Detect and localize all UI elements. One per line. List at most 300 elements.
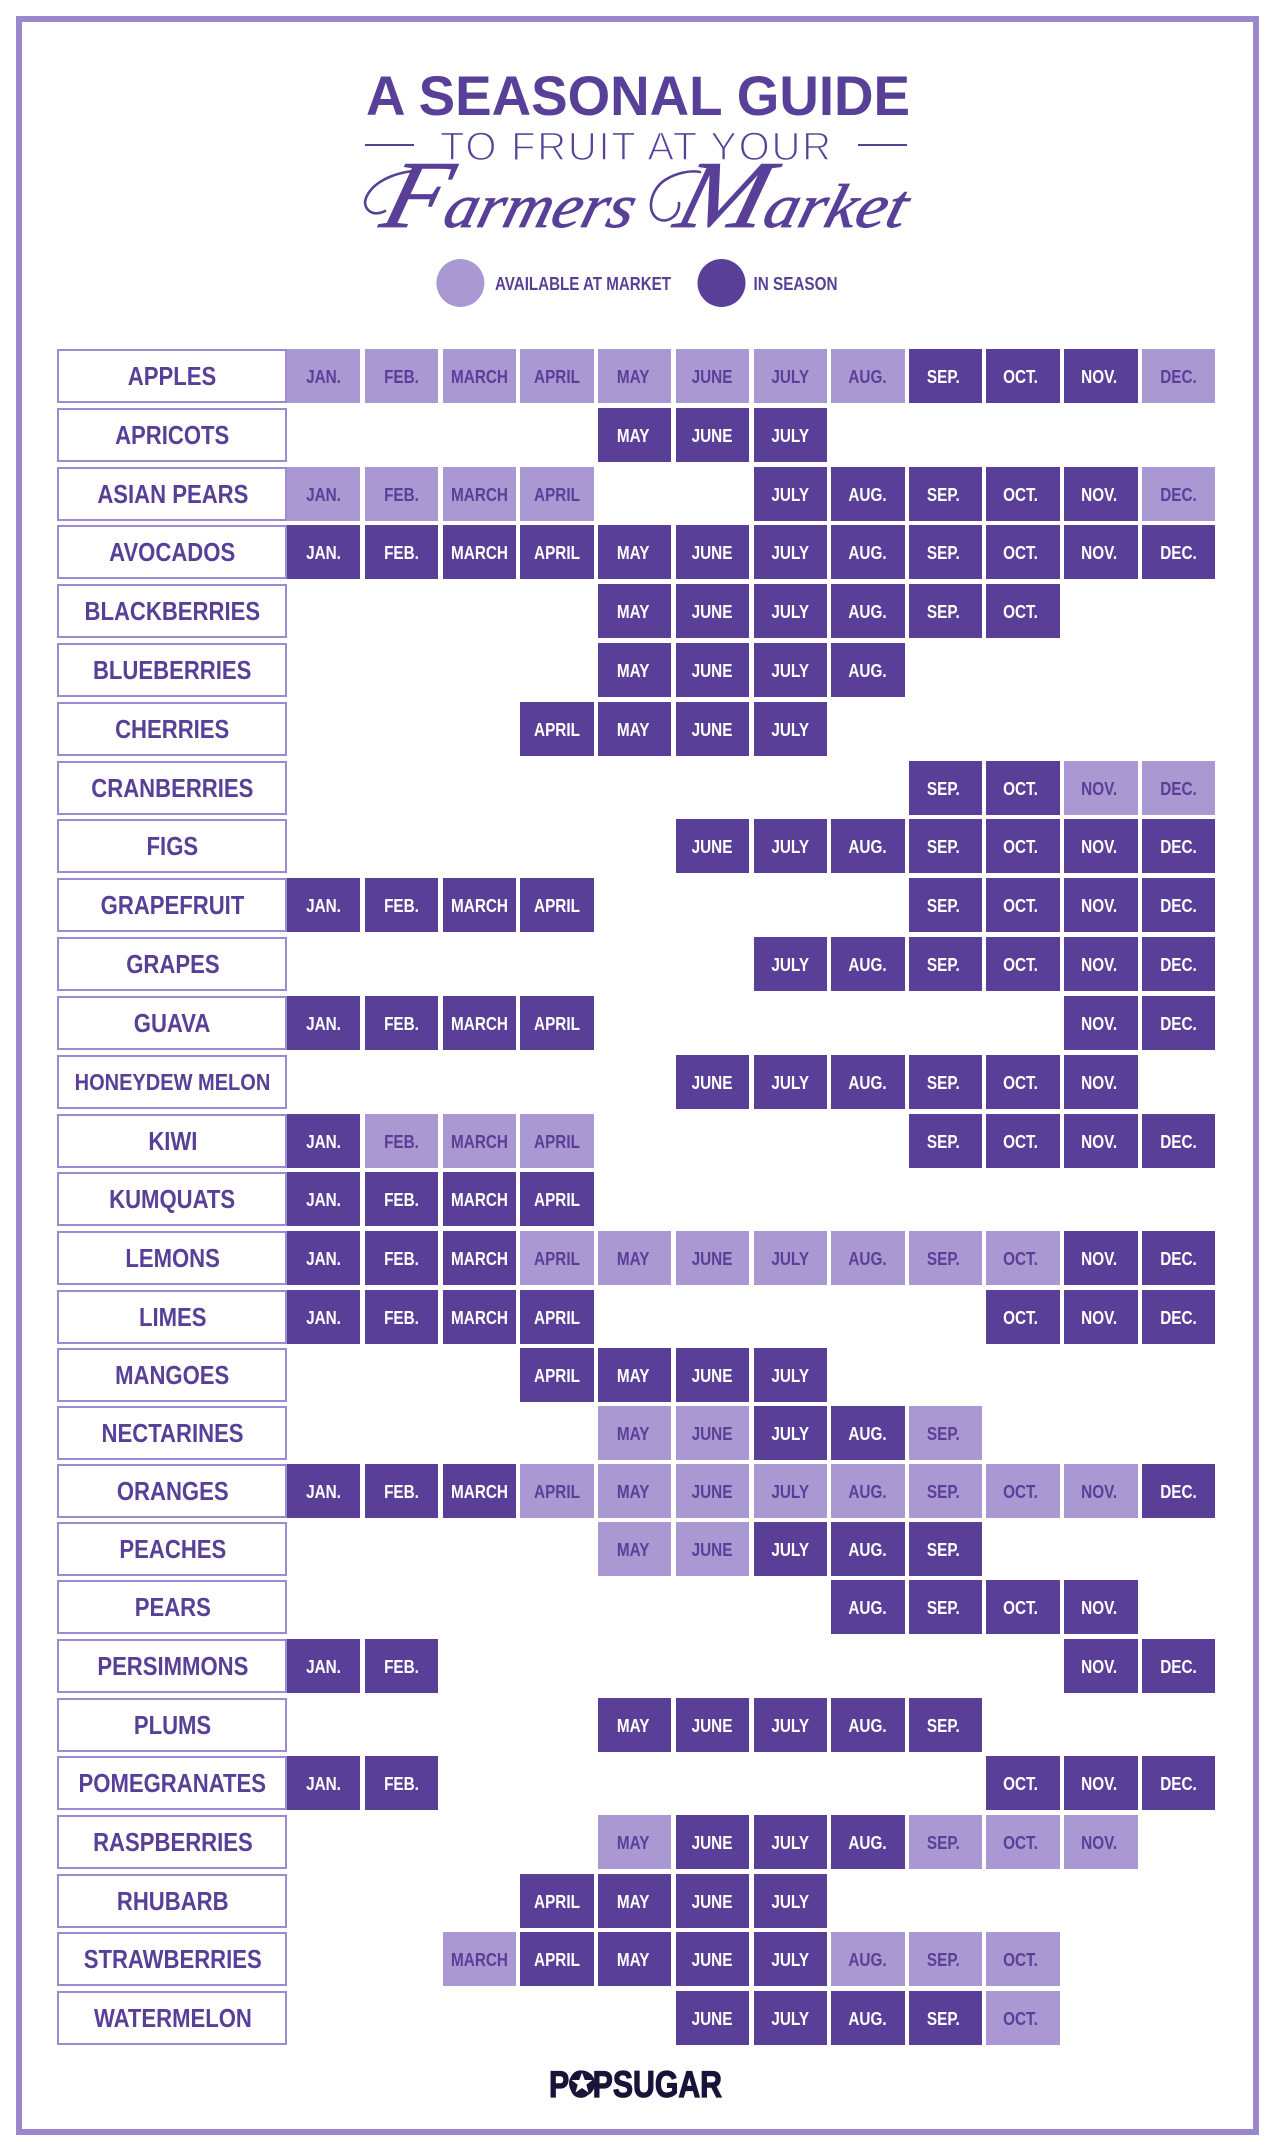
months: grapefruit: APRIL (534, 896, 580, 916)
months: guava: MARCH (451, 1014, 508, 1034)
months: limes: DEC. (1160, 1308, 1197, 1328)
months: persimmons: FEB. (384, 1657, 419, 1677)
script title: Farmers Market: Market (664, 143, 926, 249)
months: cherries: JULY (771, 720, 809, 740)
months: grapes: OCT. (1003, 955, 1038, 975)
label: asian pears: ASIAN PEARS (97, 479, 248, 509)
label: avocados: AVOCADOS (109, 537, 236, 567)
row: limes (57, 1290, 1215, 1344)
row: honeydew melon (57, 1055, 1138, 1109)
row: guava (57, 996, 1215, 1050)
months: lemons: JUNE (692, 1249, 733, 1269)
months: kiwi: DEC. (1160, 1132, 1197, 1152)
months: nectarines: AUG. (849, 1424, 887, 1444)
months: guava (287, 996, 1215, 1050)
row: strawberries (0, 1932, 1275, 1986)
months: asian pears: DEC. (1160, 485, 1197, 505)
months: apples: OCT. (1003, 367, 1038, 387)
legend: available at market: AVAILABLE AT MARKET (495, 273, 672, 294)
months: raspberries: MAY (617, 1833, 649, 1853)
row: grapefruit (57, 878, 1215, 932)
months: cranberries (909, 761, 1215, 815)
months: blackberries: MAY (617, 602, 649, 622)
months: oranges: AUG. (849, 1482, 887, 1502)
label: lemons: LEMONS (125, 1243, 220, 1273)
label: strawberries: STRAWBERRIES (83, 1944, 262, 1974)
months: asian pears: FEB. (384, 485, 419, 505)
months: oranges: MARCH (451, 1482, 508, 1502)
months: kiwi: APRIL (534, 1132, 580, 1152)
months: avocados: FEB. (384, 543, 419, 563)
months: lemons: MAY (617, 1249, 649, 1269)
months: raspberries: OCT. (1003, 1833, 1038, 1853)
row: cranberries (57, 761, 1215, 815)
months: persimmons: NOV. (1081, 1657, 1117, 1677)
label: plums (57, 1698, 287, 1752)
legend: in season: IN SEASON (754, 273, 838, 294)
months: apples: AUG. (849, 367, 887, 387)
months: guava: DEC. (1160, 1014, 1197, 1034)
months: figs: DEC. (1160, 837, 1197, 857)
label: strawberries (57, 1932, 287, 1986)
months: watermelon: SEP. (926, 2009, 959, 2029)
months: avocados: NOV. (1081, 543, 1117, 563)
months: honeydew melon: JULY (771, 1073, 809, 1093)
months: cranberries: DEC. (1160, 779, 1197, 799)
months: avocados: JULY (771, 543, 809, 563)
label: raspberries: RASPBERRIES (93, 1827, 252, 1857)
months: asian pears: APRIL (534, 485, 580, 505)
label: oranges (57, 1464, 287, 1518)
months: persimmons: DEC. (1160, 1657, 1197, 1677)
label: oranges: ORANGES (117, 1476, 228, 1506)
label: kumquats (57, 1172, 287, 1226)
months: blackberries: JULY (771, 602, 809, 622)
title line: A Seasonal Guide: A SEASONAL GUIDE (366, 64, 910, 127)
months: pomegranates: NOV. (1081, 1774, 1117, 1794)
label: avocados (57, 525, 287, 579)
label: watermelon: WATERMELON (94, 2003, 251, 2033)
label: kiwi (57, 1114, 287, 1168)
months: watermelon: AUG. (849, 2009, 887, 2029)
months: grapefruit (287, 878, 1215, 932)
months: apples: JULY (771, 367, 809, 387)
months: apples: JAN. (306, 367, 341, 387)
label: cherries (57, 702, 287, 756)
label: blackberries: BLACKBERRIES (85, 596, 260, 626)
months: blackberries: OCT. (1003, 602, 1038, 622)
months: oranges (0, 1464, 1275, 1518)
months: nectarines (598, 1406, 982, 1460)
months: strawberries: AUG. (849, 1950, 887, 1970)
label: rhubarb (57, 1874, 287, 1928)
label: honeydew melon (57, 1055, 287, 1109)
label: apricots: APRICOTS (115, 420, 230, 450)
months: guava: APRIL (534, 1014, 580, 1034)
months: avocados: JAN. (306, 543, 341, 563)
row: cherries (57, 702, 827, 756)
months: oranges: JAN. (306, 1482, 341, 1502)
months: asian pears: JULY (771, 485, 809, 505)
label: grapefruit (57, 878, 287, 932)
row: plums (0, 1698, 1275, 1752)
months: guava: JAN. (306, 1014, 341, 1034)
months: cherries: JUNE (692, 720, 733, 740)
row: blackberries (57, 584, 1060, 638)
months: blueberries: JULY (771, 661, 809, 681)
header: title and legend (364, 64, 926, 307)
months: oranges: APRIL (534, 1482, 580, 1502)
months: nectarines: MAY (617, 1424, 649, 1444)
label: blueberries: BLUEBERRIES (93, 655, 252, 685)
months: peaches: MAY (617, 1540, 649, 1560)
legend: available at market (436, 259, 672, 307)
months: grapefruit: JAN. (306, 896, 341, 916)
months: honeydew melon: NOV. (1081, 1073, 1117, 1093)
months: mangoes: JULY (771, 1366, 809, 1386)
label: guava (57, 996, 287, 1050)
months: avocados: AUG. (849, 543, 887, 563)
months: blackberries: AUG. (849, 602, 887, 622)
months: oranges: JUNE (692, 1482, 733, 1502)
months: raspberries: AUG. (849, 1833, 887, 1853)
months: cranberries: SEP. (926, 779, 959, 799)
months: grapefruit: FEB. (384, 896, 419, 916)
months: oranges: DEC. (1160, 1482, 1197, 1502)
months: watermelon: OCT. (1003, 2009, 1038, 2029)
row: raspberries (0, 1815, 1275, 1869)
months: figs: SEP. (926, 837, 959, 857)
months: asian pears: OCT. (1003, 485, 1038, 505)
months: kiwi (287, 1114, 1215, 1168)
months: asian pears: JAN. (306, 485, 341, 505)
row: nectarines (57, 1406, 982, 1460)
months: mangoes: APRIL (534, 1366, 580, 1386)
row: kumquats (57, 1172, 594, 1226)
months: pomegranates: DEC. (1160, 1774, 1197, 1794)
row: blueberries (57, 643, 905, 697)
months: apples: FEB. (384, 367, 419, 387)
months: kumquats: JAN. (306, 1190, 341, 1210)
months: apples: MARCH (451, 367, 508, 387)
label: cranberries (57, 761, 287, 815)
months: rhubarb: JULY (771, 1892, 809, 1912)
months: avocados: DEC. (1160, 543, 1197, 563)
months: apples: SEP. (926, 367, 959, 387)
row: watermelon (0, 1991, 1275, 2045)
label: apples: APPLES (128, 361, 217, 391)
months: apples: DEC. (1160, 367, 1197, 387)
label: grapes: GRAPES (126, 949, 219, 979)
label: watermelon (57, 1991, 287, 2045)
months: cranberries: OCT. (1003, 779, 1038, 799)
months: plums: MAY (617, 1716, 649, 1736)
months: pears: OCT. (1003, 1598, 1038, 1618)
months: limes (287, 1290, 1215, 1344)
months: peaches: SEP. (926, 1540, 959, 1560)
legend: in season (698, 259, 838, 307)
label: grapefruit: GRAPEFRUIT (101, 890, 244, 920)
months: apricots (598, 408, 827, 462)
label: lemons (57, 1231, 287, 1285)
row: pears (0, 1580, 1275, 1634)
label: limes (57, 1290, 287, 1344)
months: raspberries: JULY (771, 1833, 809, 1853)
months: persimmons (0, 1639, 1275, 1693)
months: nectarines: JULY (771, 1424, 809, 1444)
row: mangoes (57, 1348, 827, 1402)
label: nectarines (57, 1406, 287, 1460)
months: pomegranates: FEB. (384, 1774, 419, 1794)
months: plums (0, 1698, 1275, 1752)
months: lemons: SEP. (926, 1249, 959, 1269)
months: kumquats (287, 1172, 594, 1226)
label: apricots (57, 408, 287, 462)
months: peaches (0, 1522, 1275, 1576)
months: mangoes: JUNE (692, 1366, 733, 1386)
row: kiwi (57, 1114, 1215, 1168)
months: apples: NOV. (1081, 367, 1117, 387)
months: plums: SEP. (926, 1716, 959, 1736)
months: cranberries: NOV. (1081, 779, 1117, 799)
label: mangoes (57, 1348, 287, 1402)
months: blackberries (598, 584, 1060, 638)
months: limes: JAN. (306, 1308, 341, 1328)
script title: Farmers Market: Farmers (371, 143, 653, 249)
label: pears: PEARS (134, 1592, 211, 1622)
months: asian pears: NOV. (1081, 485, 1117, 505)
months: pears: NOV. (1081, 1598, 1117, 1618)
months: lemons: JULY (771, 1249, 809, 1269)
months: strawberries: SEP. (926, 1950, 959, 1970)
months: rhubarb: JUNE (692, 1892, 733, 1912)
label: rhubarb: RHUBARB (117, 1886, 228, 1916)
months: asian pears (287, 467, 1215, 521)
months: lemons: NOV. (1081, 1249, 1117, 1269)
months: strawberries: MARCH (451, 1950, 508, 1970)
months: guava: FEB. (384, 1014, 419, 1034)
label: persimmons (57, 1639, 287, 1693)
months: avocados (287, 525, 1215, 579)
months: limes: MARCH (451, 1308, 508, 1328)
row: asian pears (57, 467, 1215, 521)
row: oranges (57, 1464, 1215, 1518)
months: blueberries: AUG. (849, 661, 887, 681)
months: raspberries (0, 1815, 1275, 1869)
label: peaches (57, 1522, 287, 1576)
label: blueberries (57, 643, 287, 697)
months: nectarines: JUNE (692, 1424, 733, 1444)
months: apples (287, 349, 1215, 403)
months: grapefruit: NOV. (1081, 896, 1117, 916)
months: apricots: JUNE (692, 426, 733, 446)
months: grapes: SEP. (926, 955, 959, 975)
months: pears (0, 1580, 1275, 1634)
months: grapes: NOV. (1081, 955, 1117, 975)
label: limes: LIMES (139, 1302, 206, 1332)
months: pomegranates (0, 1756, 1275, 1810)
months: kiwi: JAN. (306, 1132, 341, 1152)
label: raspberries (57, 1815, 287, 1869)
months: strawberries: JULY (771, 1950, 809, 1970)
months: cherries: MAY (617, 720, 649, 740)
months: watermelon (0, 1991, 1275, 2045)
label: grapes (57, 937, 287, 991)
months: figs: OCT. (1003, 837, 1038, 857)
months: avocados: MAY (617, 543, 649, 563)
label: mangoes: MANGOES (115, 1360, 230, 1390)
months: plums: JULY (771, 1716, 809, 1736)
label: peaches: PEACHES (119, 1534, 226, 1564)
months: figs: AUG. (849, 837, 887, 857)
months: lemons (287, 1231, 1215, 1285)
label: guava: GUAVA (134, 1008, 211, 1038)
months: lemons: MARCH (451, 1249, 508, 1269)
months: oranges: JULY (771, 1482, 809, 1502)
row: persimmons (0, 1639, 1275, 1693)
months: figs: JUNE (692, 837, 733, 857)
months: figs: JULY (771, 837, 809, 857)
months: asian pears: MARCH (451, 485, 508, 505)
months: rhubarb (0, 1874, 1275, 1928)
label: nectarines: NECTARINES (101, 1418, 244, 1448)
months: strawberries (0, 1932, 1275, 1986)
label: pears (57, 1580, 287, 1634)
months: grapefruit: DEC. (1160, 896, 1197, 916)
months: avocados: SEP. (926, 543, 959, 563)
months: apricots: JULY (771, 426, 809, 446)
label: figs: FIGS (147, 831, 198, 861)
months: kumquats: APRIL (534, 1190, 580, 1210)
row: pomegranates (0, 1756, 1275, 1810)
months: apples: MAY (617, 367, 649, 387)
months: avocados: OCT. (1003, 543, 1038, 563)
months: kiwi: OCT. (1003, 1132, 1038, 1152)
months: oranges: SEP. (926, 1482, 959, 1502)
months: lemons: APRIL (534, 1249, 580, 1269)
row: apricots (57, 408, 827, 462)
months: raspberries: SEP. (926, 1833, 959, 1853)
months: avocados: MARCH (451, 543, 508, 563)
months: strawberries: JUNE (692, 1950, 733, 1970)
months: grapes: JULY (771, 955, 809, 975)
months: raspberries: NOV. (1081, 1833, 1117, 1853)
months: kiwi: FEB. (384, 1132, 419, 1152)
label: blackberries (57, 584, 287, 638)
months: kumquats: MARCH (451, 1190, 508, 1210)
months: grapefruit: SEP. (926, 896, 959, 916)
months: lemons: DEC. (1160, 1249, 1197, 1269)
label: cherries: CHERRIES (115, 714, 230, 744)
months: nectarines: SEP. (926, 1424, 959, 1444)
months: blueberries (598, 643, 905, 697)
label: persimmons: PERSIMMONS (97, 1651, 248, 1681)
months: avocados: JUNE (692, 543, 733, 563)
label: plums: PLUMS (134, 1710, 211, 1740)
months: limes: FEB. (384, 1308, 419, 1328)
months: watermelon: JULY (771, 2009, 809, 2029)
label: pomegranates: POMEGRANATES (79, 1768, 266, 1798)
script title: Farmers Market (365, 143, 926, 249)
months: peaches: JUNE (692, 1540, 733, 1560)
months: grapefruit: OCT. (1003, 896, 1038, 916)
row: rhubarb (0, 1874, 1275, 1928)
months: kiwi: MARCH (451, 1132, 508, 1152)
months: raspberries: JUNE (692, 1833, 733, 1853)
months: cherries: APRIL (534, 720, 580, 740)
row: figs (57, 819, 1215, 873)
months: strawberries: MAY (617, 1950, 649, 1970)
row: peaches (0, 1522, 1275, 1576)
months: lemons: AUG. (849, 1249, 887, 1269)
months: honeydew melon: AUG. (849, 1073, 887, 1093)
months: blueberries: MAY (617, 661, 649, 681)
months: mangoes: MAY (617, 1366, 649, 1386)
months: pomegranates: OCT. (1003, 1774, 1038, 1794)
row: lemons (57, 1231, 1215, 1285)
row: grapes (57, 937, 1215, 991)
months: oranges: MAY (617, 1482, 649, 1502)
months: rhubarb: MAY (617, 1892, 649, 1912)
months: oranges: FEB. (384, 1482, 419, 1502)
label: cranberries: CRANBERRIES (91, 773, 254, 803)
months: honeydew melon: OCT. (1003, 1073, 1038, 1093)
months: blackberries: JUNE (692, 602, 733, 622)
months: asian pears: SEP. (926, 485, 959, 505)
months: persimmons: JAN. (306, 1657, 341, 1677)
months: strawberries: APRIL (534, 1950, 580, 1970)
months: lemons: JAN. (306, 1249, 341, 1269)
months: grapes (754, 937, 1215, 991)
months: asian pears: AUG. (849, 485, 887, 505)
months: cherries (520, 702, 827, 756)
months: apples: APRIL (534, 367, 580, 387)
months: honeydew melon (676, 1055, 1138, 1109)
months: apricots: MAY (617, 426, 649, 446)
months: pomegranates: JAN. (306, 1774, 341, 1794)
months: peaches: JULY (771, 1540, 809, 1560)
months: honeydew melon: SEP. (926, 1073, 959, 1093)
months: watermelon: JUNE (692, 2009, 733, 2029)
months: guava: NOV. (1081, 1014, 1117, 1034)
months: lemons: OCT. (1003, 1249, 1038, 1269)
subtitle line with side rules: TO FRUIT AT YOUR (440, 125, 831, 169)
label: asian pears (57, 467, 287, 521)
months: figs: NOV. (1081, 837, 1117, 857)
label: kiwi: KIWI (148, 1126, 197, 1156)
months: mangoes (520, 1348, 827, 1402)
months: grapes: AUG. (849, 955, 887, 975)
label: honeydew melon: HONEYDEW MELON (75, 1069, 270, 1095)
months: limes: APRIL (534, 1308, 580, 1328)
months: avocados: APRIL (534, 543, 580, 563)
months: grapes: DEC. (1160, 955, 1197, 975)
row: avocados (57, 525, 1215, 579)
months: peaches: AUG. (849, 1540, 887, 1560)
months: honeydew melon: JUNE (692, 1073, 733, 1093)
months: pears: SEP. (926, 1598, 959, 1618)
months: grapefruit: MARCH (451, 896, 508, 916)
months: plums: JUNE (692, 1716, 733, 1736)
months: pears: AUG. (849, 1598, 887, 1618)
months: plums: AUG. (849, 1716, 887, 1736)
label: apples (57, 349, 287, 403)
months: limes: OCT. (1003, 1308, 1038, 1328)
months: limes: NOV. (1081, 1308, 1117, 1328)
months: strawberries: OCT. (1003, 1950, 1038, 1970)
label: kumquats: KUMQUATS (109, 1184, 236, 1214)
row: apples (57, 349, 1215, 403)
